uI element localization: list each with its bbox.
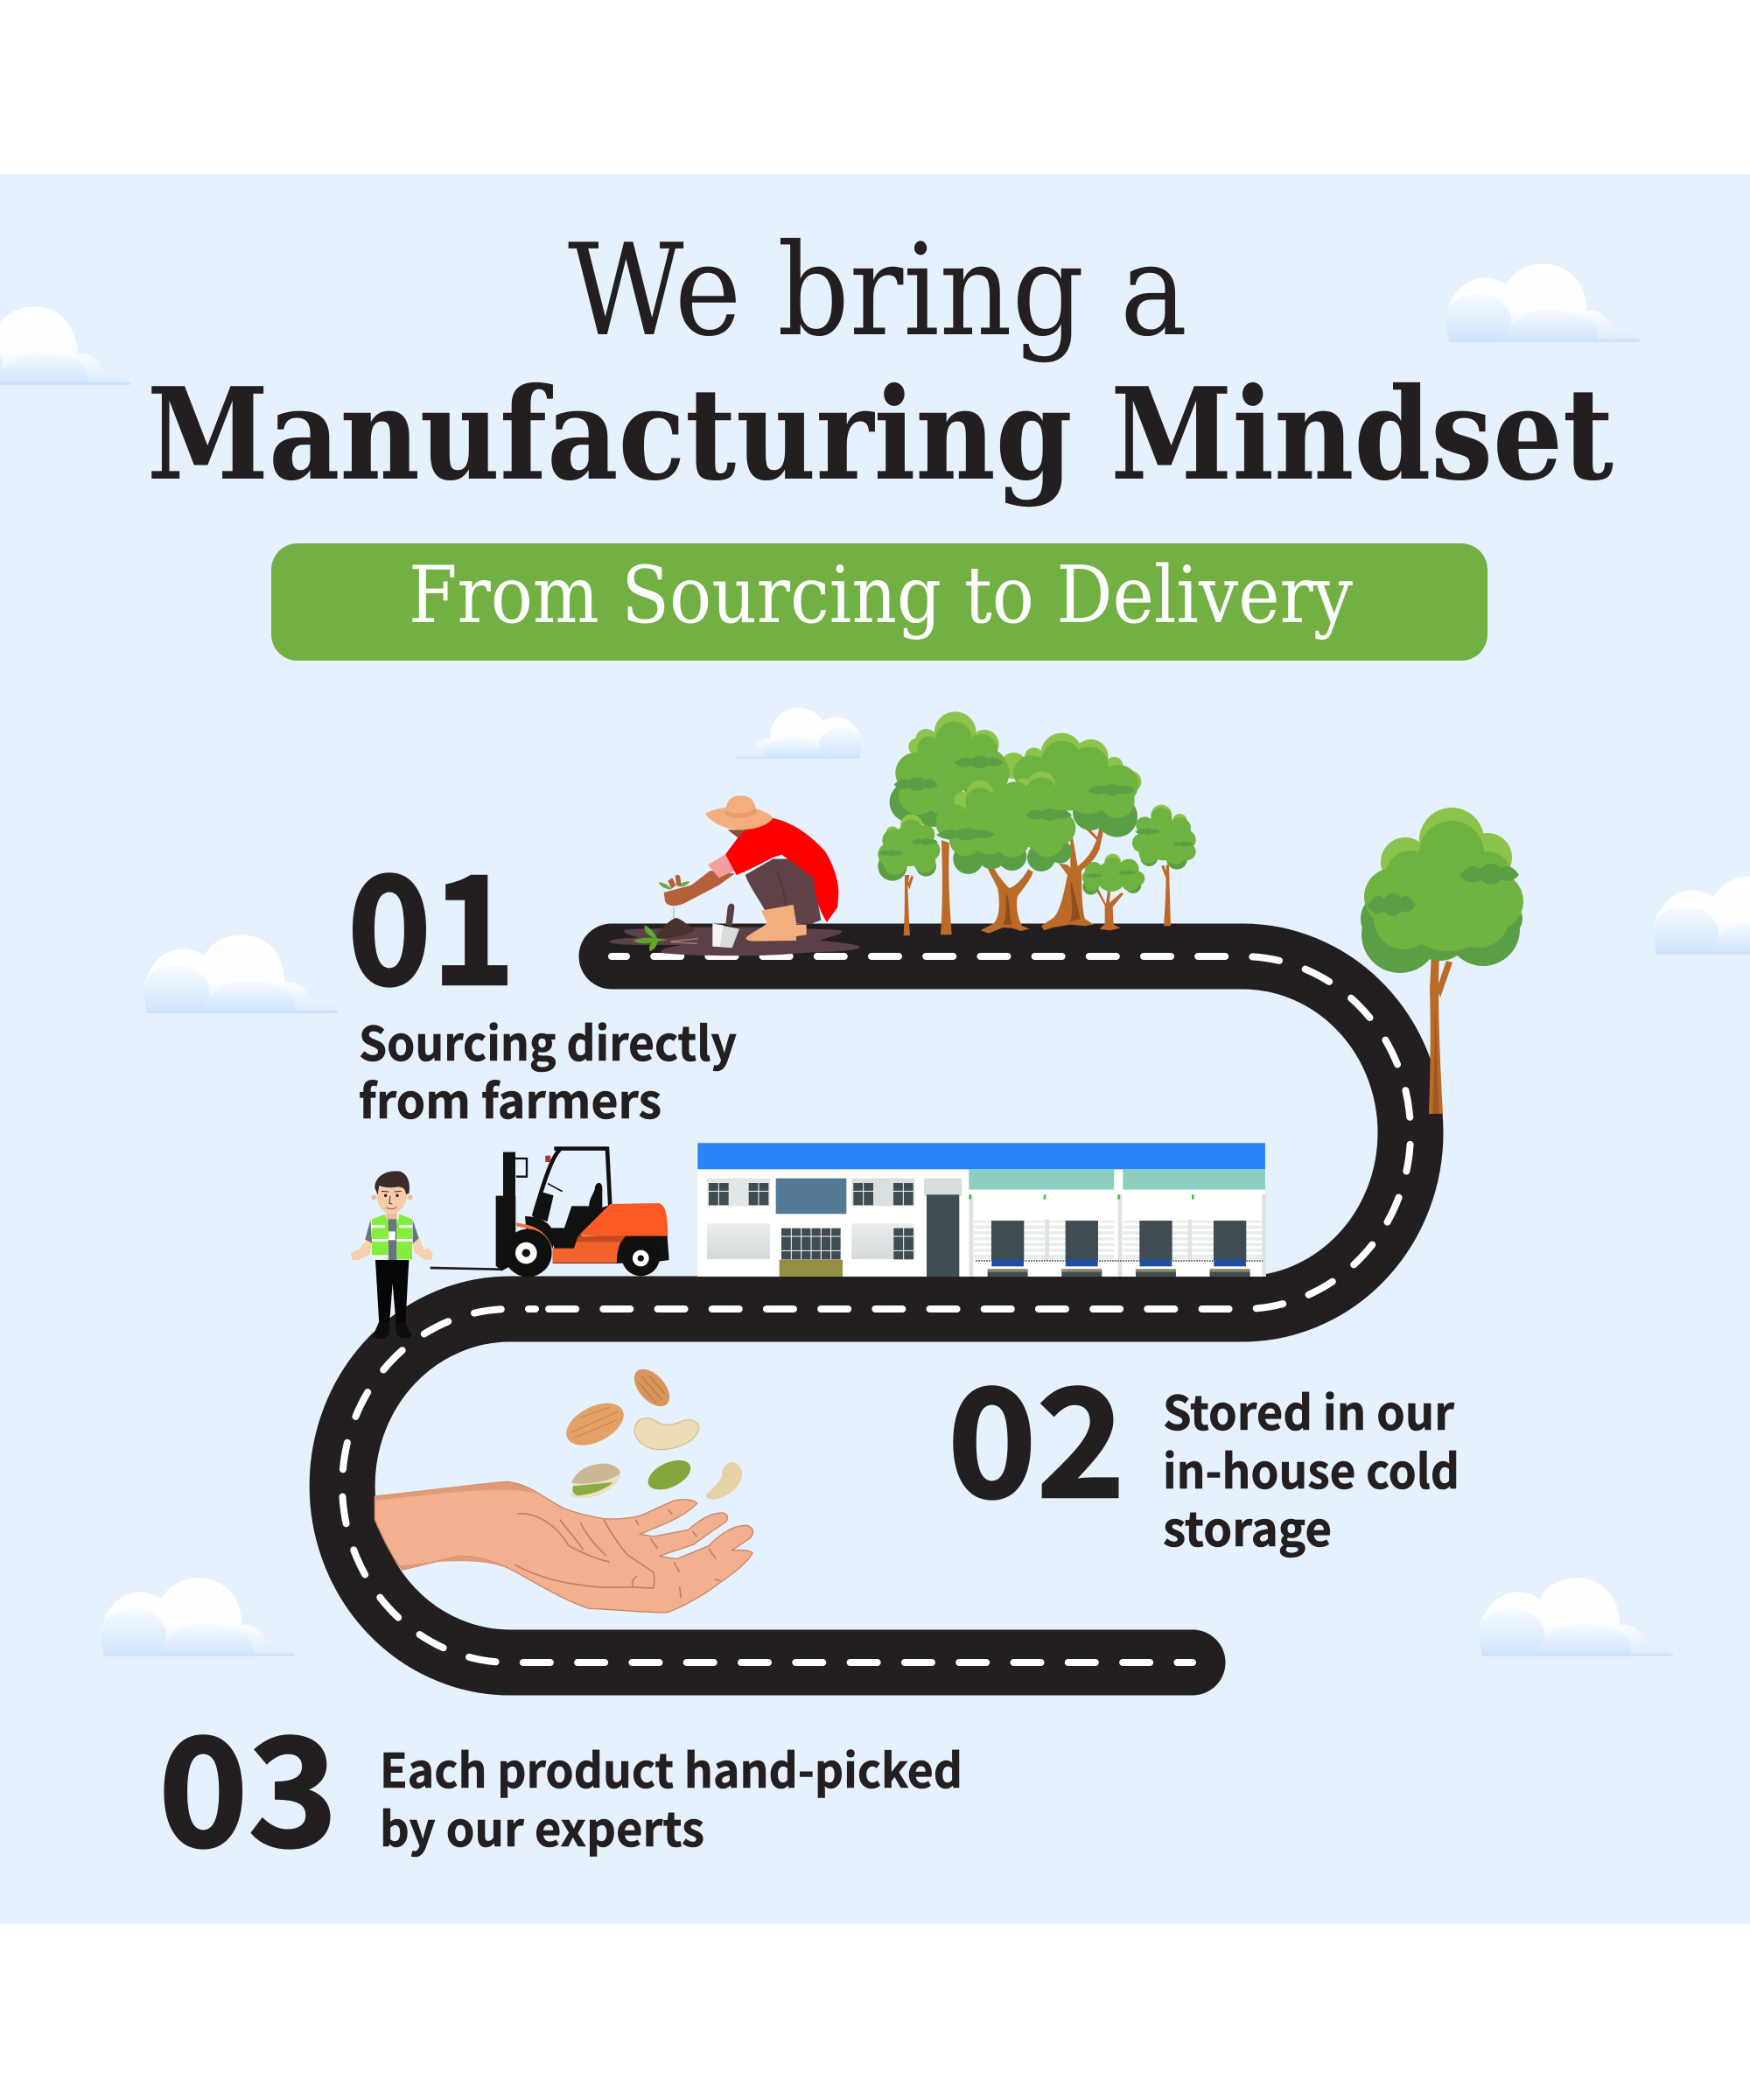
step 03 text: by our experts	[380, 1791, 704, 1860]
subtitle text: From Sourcing to Delivery	[409, 550, 1353, 641]
cloud: left of step 01	[144, 934, 338, 1013]
cloud: lower left	[102, 1578, 295, 1656]
crown	[1361, 808, 1523, 973]
cloud: top left	[0, 306, 130, 385]
forks	[430, 1268, 501, 1270]
winding road	[342, 956, 1410, 1662]
trousers	[375, 1260, 409, 1324]
step 01 text: from farmers	[359, 1063, 662, 1132]
icon: hand with falling nuts	[374, 1362, 753, 1613]
step 03 number: 03	[158, 1671, 338, 1890]
shirt	[365, 1216, 419, 1263]
step 03 text: Each product hand-picked	[380, 1732, 962, 1802]
icon: forklift	[430, 1149, 669, 1277]
step 01 number: 01	[347, 809, 515, 1028]
icon: farmer planting	[608, 795, 860, 956]
crown: left small tree	[878, 815, 940, 881]
step 02 text	[1163, 1375, 1460, 1560]
crown: front tree	[935, 772, 1075, 874]
rear wheel	[622, 1238, 660, 1276]
palm creases	[514, 1509, 720, 1599]
body	[579, 1203, 668, 1236]
step 02 number: 02	[948, 1322, 1125, 1541]
trunk group	[904, 825, 1171, 935]
cloud: above trees	[736, 708, 862, 759]
teal band	[969, 1169, 1265, 1190]
cloud: lower right	[1480, 1578, 1673, 1656]
shoes	[373, 1323, 412, 1339]
crown: back left tree	[890, 711, 1009, 827]
icon: large tree on the curve	[1361, 808, 1523, 1114]
mast	[496, 1152, 515, 1271]
icon: grove of trees	[878, 711, 1196, 935]
office block windows	[707, 1179, 962, 1277]
vest	[372, 1214, 412, 1259]
roof	[697, 1143, 1265, 1169]
cab frame	[534, 1149, 610, 1216]
crown: right small tree	[1132, 805, 1196, 870]
head	[371, 1171, 413, 1219]
loading docks	[969, 1194, 1264, 1277]
icon: warehouse building	[697, 1143, 1265, 1277]
road dashes lower	[342, 1309, 1193, 1662]
crown: tiny tree	[1082, 854, 1144, 895]
step 01 text	[359, 1005, 737, 1132]
step 02 text: storage	[1163, 1491, 1332, 1560]
step 03 text	[380, 1732, 962, 1860]
hand	[374, 1481, 753, 1613]
icon: worker in safety vest	[351, 1171, 433, 1339]
title line 1: We bring a	[568, 217, 1187, 365]
trunk	[1429, 952, 1452, 1114]
step 02 text: in-house cold	[1163, 1433, 1460, 1502]
front wheel	[504, 1229, 552, 1277]
arms	[351, 1236, 433, 1260]
subtitle banner	[271, 543, 1488, 661]
cloud: top right	[1446, 263, 1640, 342]
step 01 text: Sourcing directly	[359, 1005, 737, 1074]
cloud: right edge	[1654, 876, 1750, 955]
nuts	[559, 1362, 742, 1499]
crown: back right tree	[1000, 733, 1141, 837]
road dashes upper	[545, 956, 1410, 1309]
step 02 text: Stored in our	[1163, 1375, 1454, 1444]
